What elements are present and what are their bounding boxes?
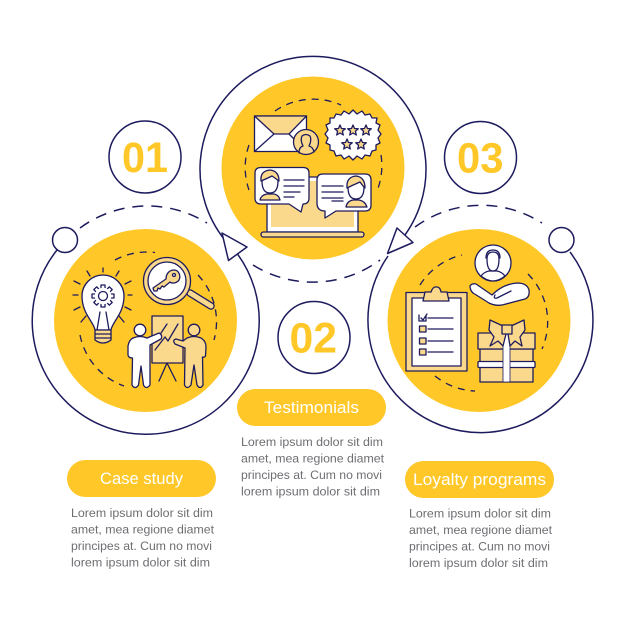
right ring arrowhead (388, 228, 413, 254)
dashed ring arc 3 (415, 205, 542, 227)
icon: chat bubble left (255, 168, 309, 212)
yellow disc 2 (222, 76, 404, 260)
ring start node 1 (52, 228, 78, 252)
badge: number 01: 01 (122, 134, 168, 182)
icon: clipboard checklist (406, 287, 467, 371)
heading pill: case study (67, 460, 216, 497)
icon: light bulb with gear (73, 268, 132, 343)
text block: case study: lorem ipsum dolor sit dim (71, 556, 210, 570)
inner dashed circle 2 (245, 99, 382, 191)
heading pill: case study: Case study (100, 470, 184, 488)
icon: user avatar in hand (470, 245, 529, 305)
icon: presenter left (128, 324, 162, 388)
icon: chat bubble right (317, 174, 371, 218)
text block: loyalty programs: principes at. Cum no movi (409, 540, 550, 554)
dashed ring arc 2 (253, 260, 380, 282)
heading pill: loyalty programs: Loyalty programs (413, 471, 546, 489)
text block: testimonials: lorem ipsum dolor sit dim (241, 484, 380, 498)
text block: case study: principes at. Cum no movi (71, 539, 212, 553)
heading pill: testimonials: Testimonials (264, 399, 359, 417)
text block: testimonials (241, 435, 385, 498)
solid ring arc 3 (368, 252, 593, 433)
text block: loyalty programs (409, 506, 553, 570)
badge: number 02: 02 (290, 314, 337, 362)
dashed ring arc 1 (80, 206, 207, 228)
panel: loyalty circle (368, 205, 593, 433)
text block: case study (71, 506, 215, 570)
badge: number 03 (444, 122, 516, 194)
text block: testimonials: amet, mea regione diamet (241, 452, 385, 466)
heading pill: loyalty programs (405, 461, 554, 498)
ring start node 3 (549, 228, 574, 252)
badge: number 02 (278, 302, 350, 374)
solid ring arc 2 (200, 56, 426, 239)
icon: laptop (261, 177, 364, 237)
text block: testimonials: Lorem ipsum dolor sit dim (241, 435, 383, 449)
text block: loyalty programs: amet, mea regione diamet (409, 523, 553, 537)
text block: loyalty programs: lorem ipsum dolor sit dim (409, 556, 548, 570)
icon: envelope with user (254, 116, 318, 154)
text block: case study: Lorem ipsum dolor sit dim (71, 506, 213, 520)
panel: case study circle (32, 206, 259, 434)
yellow disc 3 (388, 229, 570, 412)
icon: magnifier with key (144, 258, 211, 306)
text block: testimonials: principes at. Cum no movi (241, 468, 382, 482)
badge: number 03: 03 (457, 134, 504, 182)
icon: star rating badge (325, 110, 381, 160)
icon: presenter right (174, 324, 206, 388)
text block: case study: amet, mea regione diamet (71, 522, 215, 536)
solid ring arc 1 (32, 250, 259, 434)
inner dashed circle 3 (420, 255, 548, 391)
panel: testimonials circle (200, 56, 426, 282)
yellow disc 1 (54, 229, 237, 412)
heading pill: testimonials (237, 389, 386, 426)
badge: number 01 (109, 121, 181, 193)
text block: loyalty programs: Lorem ipsum dolor sit dim (409, 506, 551, 520)
left ring arrowhead (222, 233, 247, 260)
inner dashed circle 1 (80, 252, 217, 386)
icon: gift box (478, 320, 535, 382)
icon: presentation board (152, 316, 183, 381)
